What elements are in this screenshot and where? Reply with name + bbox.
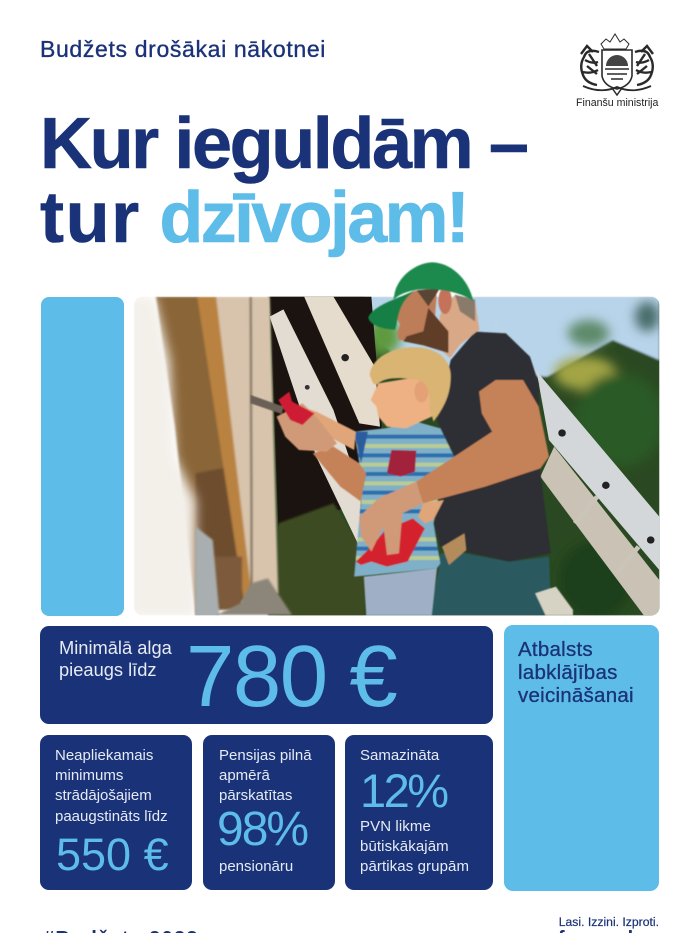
man: head with green cap [368, 262, 479, 358]
photo: father and son painting a wall [134, 262, 660, 616]
title [40, 104, 527, 258]
text: pensions label: apmērā [219, 767, 270, 784]
child: hair [370, 347, 451, 422]
text: VAT label: pārtikas grupām [360, 858, 469, 875]
title: Kur ieguldām – [40, 104, 527, 184]
man: jeans [430, 553, 551, 615]
text: non-taxable label: minimums [55, 767, 123, 784]
logo text: Finanšu ministrija [576, 97, 658, 109]
text: minimum wage label: Minimālā alga [59, 637, 172, 658]
text: VAT label: PVN likme [360, 818, 431, 835]
background: sky and trees [268, 297, 664, 620]
background: dark green lower garden [278, 503, 364, 615]
man: neck [437, 295, 479, 358]
man: face [393, 290, 448, 353]
text: welfare heading: labklājības [518, 661, 618, 684]
background: blurred white foreground [130, 297, 196, 617]
man: t-shirt [433, 332, 551, 562]
child: red pocket [387, 450, 416, 477]
panel: blue side bar [41, 297, 124, 616]
panel: pensions [203, 735, 335, 890]
text: non-taxable label: paaugstināts līdz [55, 808, 168, 825]
text: pensions label: pārskatītas [219, 787, 292, 804]
text: VAT label [360, 818, 469, 875]
subtitle: Budžets drošākai nākotnei [40, 36, 326, 62]
man: front hair [417, 288, 440, 306]
panel: minimum wage [40, 626, 493, 724]
number: 98%: 98% [217, 803, 307, 856]
child: face [371, 377, 437, 428]
child: pants [364, 568, 437, 615]
man: ear [438, 287, 452, 314]
child: lower arm [418, 500, 444, 523]
text: pensions label: Pensijas pilnā [219, 747, 312, 764]
child: raised arm [308, 409, 357, 450]
text: VAT label: būtiskākajām [360, 838, 449, 855]
background: ladders [270, 297, 659, 615]
number: 550 €: 550 € [56, 829, 169, 880]
man: back hair [455, 295, 475, 321]
figures: man and child [251, 262, 573, 615]
man: hand [359, 482, 423, 555]
hand holding child's hand [277, 403, 337, 452]
man: right arm [416, 380, 549, 503]
rope [535, 587, 573, 615]
man: beard [403, 308, 448, 353]
panel: welfare support [504, 625, 659, 891]
man: cap brim [368, 290, 417, 330]
text: non-taxable label: strādājošajiem [55, 787, 152, 804]
red glove in hand [278, 392, 314, 425]
child: striped shirt [351, 422, 458, 577]
text: welfare heading [518, 638, 634, 707]
background: dark roof [270, 297, 382, 527]
footer slogan: Lasi. Izzini. Izproti. [559, 915, 659, 929]
title: tur dzīvojam! [40, 178, 467, 258]
number: 12%: 12% [360, 764, 447, 817]
text: welfare heading: veicināšanai [518, 684, 634, 707]
text: minimum wage label: pieaugs līdz [59, 659, 157, 680]
red gloves held by child [356, 518, 425, 567]
icon: coat of arms [580, 33, 654, 96]
background: wooden wall [156, 297, 278, 615]
brush [251, 395, 283, 414]
text: non-taxable label [55, 747, 168, 825]
text: pensions label [219, 747, 312, 804]
text: reduced: Samazināta [360, 747, 439, 764]
text: pensioners: pensionāru [219, 858, 293, 875]
number: 780 €: 780 € [186, 628, 396, 725]
text: minimum wage label [59, 637, 172, 680]
man: left arm behind child [313, 447, 366, 502]
man: cap crown [393, 262, 473, 301]
text: welfare heading: Atbalsts [518, 638, 593, 661]
panel: VAT [345, 735, 493, 890]
panel: non-taxable minimum [40, 735, 192, 890]
logo: Finanšu ministrija [576, 33, 658, 109]
text: non-taxable label: Neapliekamais [55, 747, 153, 764]
